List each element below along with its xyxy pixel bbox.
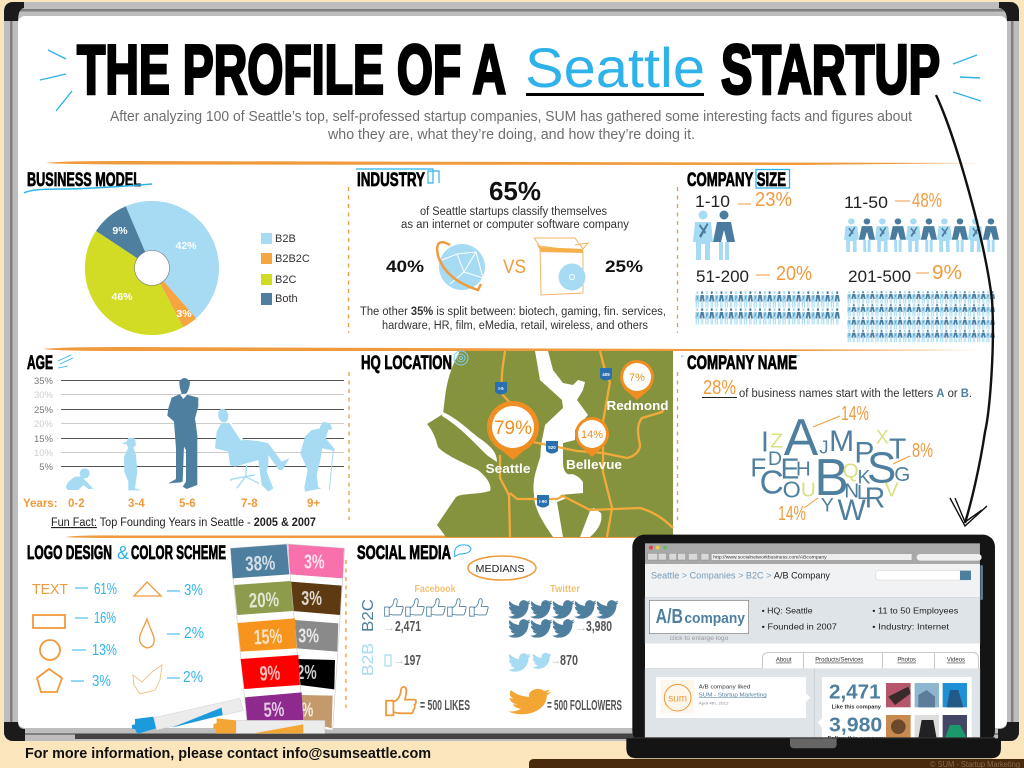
age chart gridlines: 15% [34,434,54,445]
heading: company size: COMPANY SIZE [687,170,786,191]
logo type: triangle: 3% [184,582,203,599]
heading: logo design and color scheme [27,543,226,564]
highway shields [495,368,612,508]
logo type: rectangle [33,610,116,628]
map pin: Seattle 79%: Seattle [486,461,530,476]
medians badge [468,556,536,580]
letter cloud: D [768,449,782,470]
stat 28%: 28% [703,377,736,399]
pie legend: B2C [275,274,296,286]
size 11-50: 48% [912,190,942,212]
icon: globe [437,242,485,290]
left swatch strip: 9% [259,662,281,686]
activity card: April 4th, 2012 [699,701,730,706]
size 51-200: 20% [776,263,812,285]
title handwritten word: Seattle [525,36,705,99]
age chart gridlines: 5% [39,462,54,473]
letter cloud: Z [770,429,783,452]
letter cloud: F [750,453,766,483]
breadcrumb: Seattle > Companies > B2C > A/B Company [651,570,830,580]
icon: businessman in chair [215,408,289,492]
letter callouts: 14% [841,403,869,425]
age axis labels: Years: [23,498,58,510]
panel: age [23,353,344,529]
fun fact: Fun Fact: Top Founding Years in Seattle - 2005 & 2007 [51,517,316,529]
letter cloud: Y [821,496,834,517]
medians badge: MEDIANS [476,563,524,575]
company logo: A/B [656,606,683,628]
letter cloud: J [819,436,829,457]
company facts: • Industry: Internet [872,621,950,631]
size 201-500: 201-500 [848,267,911,286]
size 1-10: 23% [755,189,792,211]
heading: logo design and color scheme: & [117,543,129,563]
map pin: Redmond 7%: 7% [629,372,645,384]
stat 28%: of business names start with the letters A or B. [739,388,972,400]
age chart gridlines: 20% [34,419,54,430]
size 1-10: 1-10 [695,192,730,211]
panel: social media [357,543,622,715]
age axis labels: 3-4 [128,498,145,510]
letter cloud: L [857,481,868,504]
pie legend: B2B [275,233,296,245]
letter cloud: A [784,408,819,466]
B2C axis label: B2C [360,599,377,632]
right swatch strip: % [302,699,313,722]
facebook column: Facebook [414,584,456,595]
panel: HQ location [361,351,673,537]
company logo: click to enlarge logo [670,636,729,642]
pie chart: 3% [176,308,192,320]
icon: left emphasis strokes [40,50,72,111]
stat 28% [702,377,972,400]
B2C facebook likes: → [384,622,395,634]
map pin: Bellevue 14%: 14% [581,429,603,441]
logo type: circle: 13% [92,642,117,659]
left swatch strip [230,544,303,727]
letter cloud: B [814,448,849,506]
age chart gridlines: 30% [34,390,54,401]
stat description [401,206,629,231]
left swatch strip: 15% [253,625,283,649]
browser chrome: http://www.socialnetworkbusiness.com/ABcompany [713,554,828,559]
follower photos [886,683,967,738]
B2C twitter followers: 3,980 [586,618,612,635]
logo type: text: TEXT [32,581,68,598]
icon: child [122,438,142,490]
legend: 500 followers: = 500 FOLLOWERS [547,697,622,714]
map pin: Seattle 79% [486,401,539,476]
twitter column: Twitter [550,584,580,595]
icon: elderly man [300,422,335,492]
icon: baby [66,468,93,490]
age chart gridlines: 35% [34,376,54,387]
pie chart: 46% [111,291,133,303]
letter cloud: P [854,436,874,469]
letter cloud: G [894,463,910,486]
letter cloud: T [889,433,906,465]
letter cloud: X [876,427,889,448]
B2C twitter followers: → [576,622,587,634]
B2C twitter followers [508,600,619,638]
right swatch strip: 3% [304,550,325,573]
panel: business model [24,170,310,335]
logo type: text: 61% [94,581,117,598]
pie chart: 42% [175,240,197,252]
icons: seated and elderly silhouettes [215,408,335,492]
activity card [656,677,810,718]
letter cloud: R [865,483,885,515]
heading: company name: “ [681,354,684,363]
letter callouts: 14% [778,503,806,525]
size 201-500: 9% [932,262,962,284]
heading: logo design and color scheme: LOGO DESIGN [27,543,112,564]
letter callouts: 8% [912,440,933,462]
heading: business model [24,170,152,193]
size 11-50: 11-50 [844,193,888,212]
letter cloud: N [844,480,859,503]
logo type: text [32,581,117,598]
logo type: triangle [134,582,203,599]
right swatch strip: 3% [298,624,319,647]
letter cloud: H [796,458,811,481]
pie legend: B2B2C [275,253,310,265]
stats card [818,677,972,742]
pie legend [261,233,310,305]
age axis labels: 7-8 [241,498,258,510]
left swatch strip: 20% [248,588,280,613]
legend: 500 likes [386,687,470,715]
page tabs: Products/Services [815,658,863,664]
logo type: animal: 2% [183,669,203,686]
laptop base [626,737,1001,758]
title: THE PROFILE OF A [77,30,506,108]
map pin: Seattle 79%: 79% [494,418,532,439]
browser chrome [645,543,982,564]
panel: logo design and color scheme [27,543,345,734]
B2C facebook likes: 2,471 [395,618,421,635]
orange marker [213,718,325,733]
left swatch strip: 5% [263,698,285,722]
industry note: hardware, HR, film, eMedia, retail, wireless, and others [382,320,648,332]
footer brown bar [529,759,1024,768]
right swatch strip [287,544,345,730]
heading: industry: INDUSTRY [357,170,425,191]
company facts: • Founded in 2007 [762,621,837,631]
size 201-500 [847,262,995,343]
letter cloud: O [783,476,801,502]
size 51-200: 51-200 [696,267,749,286]
letter cloud: K [858,467,871,488]
letter cloud: I [761,427,769,459]
age chart gridlines: 10% [34,448,54,459]
highway shields: I-5 [498,386,504,391]
company facts: • 11 to 50 Employees [872,606,959,616]
highway shields: I-90 [539,499,547,504]
stats card: Follow this company [828,736,885,742]
B2B facebook likes: → [394,655,405,667]
page tabs [762,653,978,668]
activity card: sum [668,693,687,704]
pie legend: Both [275,293,298,305]
B2B twitter followers: 870 [560,652,578,669]
B2B twitter followers: → [550,655,561,667]
B2C facebook likes [384,599,488,635]
legend: 500 followers [508,689,622,714]
heading: company name: ” [797,354,800,363]
page tabs: Photos [897,658,916,664]
letter cloud: S [867,443,896,492]
panel: company size [687,170,999,343]
page tabs: Videos [947,658,965,664]
map pin: Redmond 7% [606,360,669,413]
age chart gridlines: 25% [34,405,54,416]
web page [645,564,983,742]
industry note: The other 35% is split between: biotech, gaming, fin. services, [360,306,666,318]
subtitle [110,109,912,143]
left swatch strip: 38% [245,551,276,576]
age chart gridlines [34,376,344,473]
letter cloud: V [885,479,899,502]
map pin: Bellevue 14% [566,417,622,472]
company facts [762,606,959,631]
subtitle: who they are, what they’re doing, and how they’re doing it. [327,127,695,143]
B2B twitter followers [508,652,578,672]
B2B facebook likes [385,652,421,669]
size 11-50 [844,190,999,252]
markers [132,698,325,734]
age axis labels [23,498,320,510]
logo type: animal [133,665,203,694]
heading: company name [681,353,800,374]
panel: industry [356,169,666,332]
VS label: VS [503,257,526,278]
footer contact line: For more information, please contact info@sumseattle.com [25,745,431,762]
letter callouts [778,403,933,525]
search box [876,571,971,580]
letter cloud: M [829,425,854,458]
age axis labels: 5-6 [179,498,196,510]
activity card: SUM - Startup Marketing [699,692,767,698]
logo type: pentagon [37,669,111,692]
B2B axis label: B2B [360,643,377,676]
age axis labels: 9+ [307,498,320,510]
laptop bezel [632,535,995,743]
stats card: Like this company [832,704,881,710]
letter cloud: C [760,464,784,501]
map pin: Bellevue 14%: Bellevue [566,457,622,472]
blue marker [132,698,243,734]
logo type: circle [40,640,117,660]
arrow [936,95,993,526]
letter cloud: U [801,479,816,502]
icon: man in suit [167,378,198,489]
company logo: company [684,611,746,627]
letter cloud: E [781,453,799,485]
company facts: • HQ: Seattle [762,606,813,616]
logo type: drop: 2% [184,625,204,642]
headline stat 65%: 65% [489,176,541,206]
heading: HQ location: HQ LOCATION [361,353,452,374]
pie chart [85,201,219,335]
color swatches [230,544,345,730]
stats card: 3,980 [829,714,882,737]
stat 25%: 25% [605,257,643,276]
stats card: 2,471 [829,680,881,703]
highway shields: 520 [548,445,556,450]
stat 40%: 40% [386,257,424,276]
heading: business model: BUSINESS MODEL [27,170,141,191]
size 51-200 [695,263,840,325]
icons: baby, child and man silhouettes [66,378,198,490]
right swatch strip: 2% [297,661,317,684]
activity card: A/B company liked [699,685,750,691]
legend: 500 likes: = 500 LIKES [420,697,470,714]
heading: company name: COMPANY NAME [687,353,797,374]
stat description: as an internet or computer software company [401,219,629,231]
page tabs: About [776,658,792,664]
letter cloud: W [837,494,866,527]
icon: right emphasis strokes [953,55,981,101]
highway shields: 405 [602,372,610,377]
panel: company name [681,353,972,527]
pie chart: 9% [112,225,128,237]
logo type: pentagon: 3% [92,673,111,690]
industry note [360,306,666,332]
right swatch strip: 3% [301,587,322,610]
size 1-10 [693,189,792,260]
logo type: rectangle: 16% [94,610,116,627]
map pin: Redmond 7%: Redmond [606,398,669,413]
laptop mockup [626,535,1001,758]
stat description: of Seattle startups classify themselves [420,206,607,218]
age axis labels: 0-2 [68,498,85,510]
subtitle: After analyzing 100 of Seattle’s top, self-professed startup companies, SUM has gathered some interesting facts and figures about [110,109,912,125]
logo type: drop [140,619,204,648]
letter cloud [750,408,910,527]
heading: age: AGE [27,353,53,374]
heading: social media: SOCIAL MEDIA [357,543,451,564]
heading: logo design and color scheme: COLOR SCHEME [131,543,226,564]
map [427,351,673,537]
letter cloud: Q [843,459,859,482]
company logo [649,600,749,642]
B2B facebook likes: 197 [404,652,421,669]
icon: software box [534,238,588,295]
